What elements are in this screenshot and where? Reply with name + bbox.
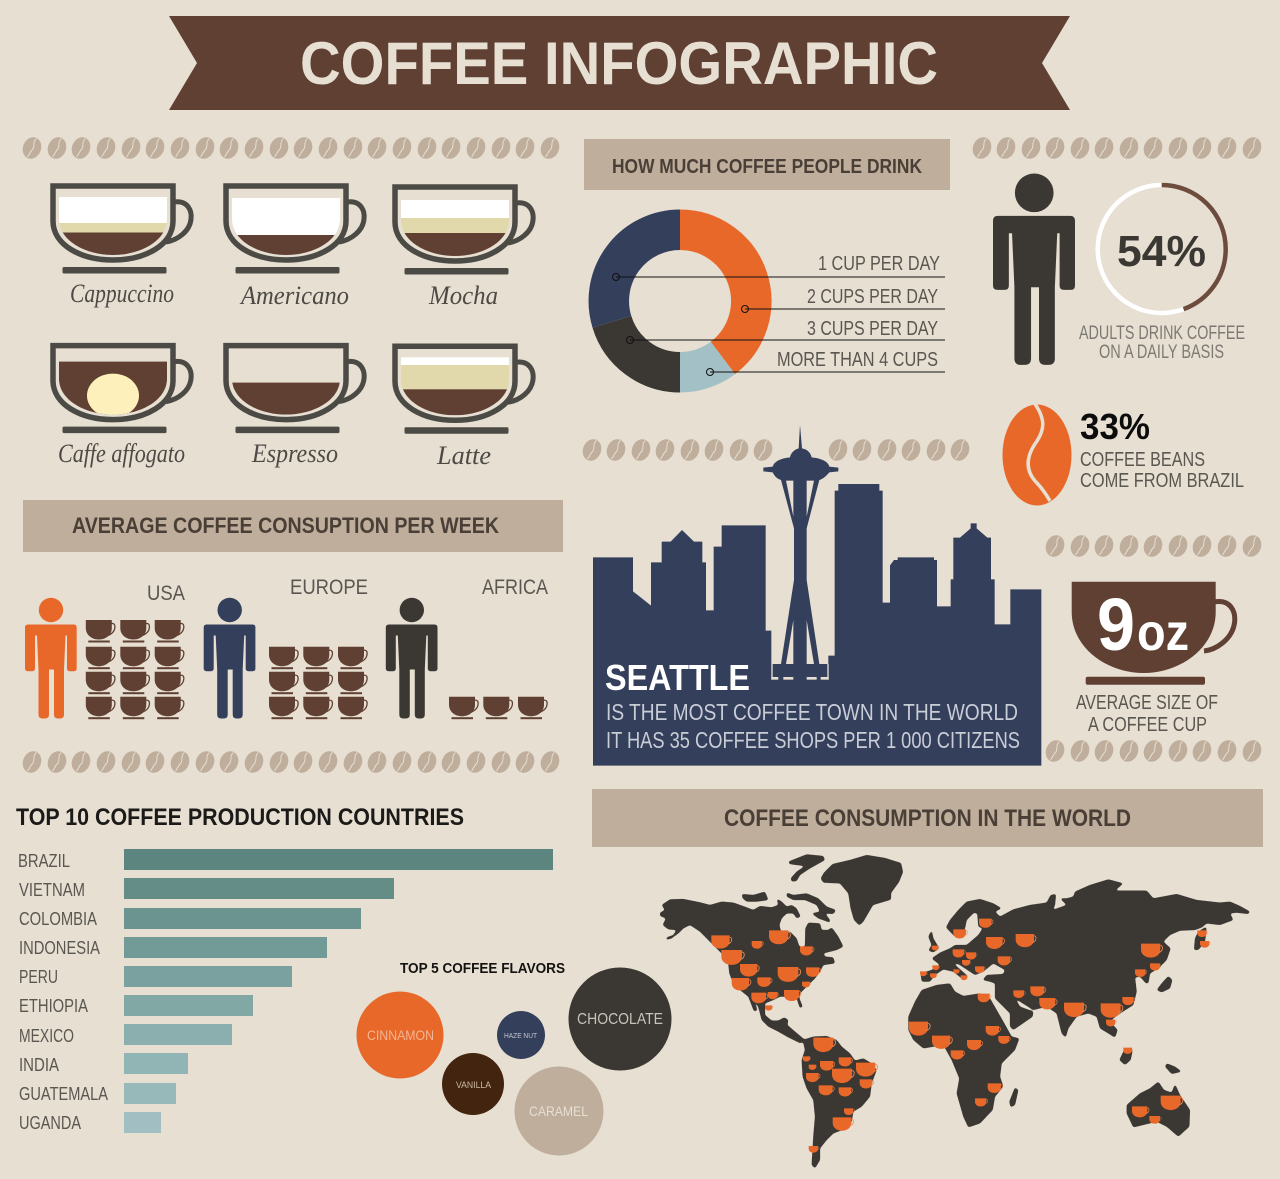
panel: seattle skyline xyxy=(593,425,1041,766)
title banner: COFFEE INFOGRAPHIC xyxy=(300,30,938,97)
bean row: below cup xyxy=(1043,737,1264,765)
map: Americas and Greenland xyxy=(660,854,903,1168)
cup: caffe affogato xyxy=(50,346,191,433)
bar chart: top 10 countries: INDONESIA xyxy=(19,938,100,958)
donut legend: 1 CUP PER DAY xyxy=(818,253,940,275)
bean row: above cup xyxy=(1043,532,1264,560)
icon: coffee bean xyxy=(1002,404,1072,506)
bubble chart: top 5 flavors: HAZE NUT xyxy=(504,1033,538,1040)
stat: 54 percent ring: 54% xyxy=(1117,227,1206,276)
label: cappuccino: Cappuccino xyxy=(70,279,174,308)
panel: how much coffee people drink: HOW MUCH COFFEE PEOPLE DRINK xyxy=(612,156,922,178)
seattle text: IT HAS 35 COFFEE SHOPS PER 1 000 CITIZENS xyxy=(606,727,1020,753)
label: mocha: Mocha xyxy=(428,281,498,310)
stat: 9oz cup xyxy=(1072,582,1235,736)
cup: mocha xyxy=(392,187,533,274)
bubble chart: top 5 flavors: CHOCOLATE xyxy=(577,1011,663,1028)
bar chart: top 10 countries: MEXICO xyxy=(19,1026,74,1046)
bubble chart: top 5 flavors: VANILLA xyxy=(456,1080,491,1090)
panel: average coffee consumption header xyxy=(23,500,563,552)
stat: 54 percent ring: ON A DAILY BASIS xyxy=(1099,342,1224,363)
world map xyxy=(660,854,1250,1168)
bean row: top right xyxy=(970,134,1264,162)
bean row: lower left xyxy=(20,748,562,776)
label: caffe affogato: Caffe affogato xyxy=(58,439,185,468)
stat: 9oz cup: oz xyxy=(1137,604,1189,662)
donut legend: MORE THAN 4 CUPS xyxy=(777,349,938,371)
skyline silhouette xyxy=(593,425,1041,766)
pictogram: Africa xyxy=(386,576,548,719)
stat: 33 percent: COFFEE BEANS xyxy=(1080,449,1205,471)
coffee types panel xyxy=(50,186,533,470)
bubble chart: top 5 flavors: CARAMEL xyxy=(529,1103,588,1119)
donut chart xyxy=(609,230,751,372)
seattle text xyxy=(605,657,1020,753)
donut legend xyxy=(612,253,945,376)
bar chart: top 10 countries: UGANDA xyxy=(19,1113,81,1133)
panel: coffee consumption in the world header: COFFEE CONSUMPTION IN THE WORLD xyxy=(724,805,1131,832)
cup: latte xyxy=(392,346,533,434)
map: Eurasia Africa Australia xyxy=(908,879,1250,1137)
cup: cappuccino xyxy=(50,186,191,274)
label: latte: Latte xyxy=(436,441,491,470)
pictogram: Europe: EUROPE xyxy=(290,576,368,599)
bar chart: top 10 countries: INDIA xyxy=(19,1055,59,1075)
seattle text: IS THE MOST COFFEE TOWN IN THE WORLD xyxy=(606,699,1018,725)
donut legend: 3 CUPS PER DAY xyxy=(807,318,938,340)
icon: person large xyxy=(993,173,1075,365)
label: espresso: Espresso xyxy=(251,439,338,468)
stat: 9oz cup: AVERAGE SIZE OF xyxy=(1076,692,1218,714)
bar chart: top 10 countries: BRAZIL xyxy=(18,851,70,871)
donut legend: 2 CUPS PER DAY xyxy=(807,286,938,308)
panel: coffee consumption in the world header xyxy=(592,789,1263,847)
cup: americano xyxy=(223,186,364,274)
stat: 9oz cup: A COFFEE CUP xyxy=(1088,714,1207,736)
pictogram: USA xyxy=(25,582,185,719)
panel: how much coffee people drink xyxy=(584,139,950,190)
title banner xyxy=(169,16,1070,110)
bar chart: top 10 countries: ETHIOPIA xyxy=(19,996,88,1016)
bar chart: top 10 countries xyxy=(18,849,553,1133)
bar chart: top 10 countries: VIETNAM xyxy=(19,880,85,900)
stat: 54 percent ring xyxy=(1079,185,1245,363)
panel: average coffee consumption header: AVERAGE COFFEE CONSUPTION PER WEEK xyxy=(72,513,499,538)
bar chart: top 10 countries: PERU xyxy=(19,967,58,987)
seattle text: SEATTLE xyxy=(605,657,750,698)
cup: espresso xyxy=(223,346,364,433)
bubble chart: top 5 flavors xyxy=(356,961,672,1156)
bubble chart: top 5 flavors: CINNAMON xyxy=(367,1027,434,1043)
pictogram: Europe xyxy=(204,576,368,719)
stat: 9oz cup: 9 xyxy=(1097,583,1135,666)
pictogram: Africa: AFRICA xyxy=(482,576,548,599)
bean row: top left xyxy=(20,134,562,162)
stat: 33 percent: 33% xyxy=(1080,406,1150,447)
bean row: middle left xyxy=(580,436,972,464)
pictogram: USA: USA xyxy=(147,582,185,605)
stat: 33 percent xyxy=(1080,406,1244,492)
bar chart: top 10 countries: GUATEMALA xyxy=(19,1084,108,1104)
stat: 33 percent: COME FROM BRAZIL xyxy=(1080,470,1244,492)
heading: top 10 countries: TOP 10 COFFEE PRODUCTION COUNTRIES xyxy=(16,804,464,831)
bar chart: top 10 countries: COLOMBIA xyxy=(19,909,97,929)
label: americano: Americano xyxy=(239,281,349,310)
bubble chart: top 5 flavors: TOP 5 COFFEE FLAVORS xyxy=(400,961,565,977)
